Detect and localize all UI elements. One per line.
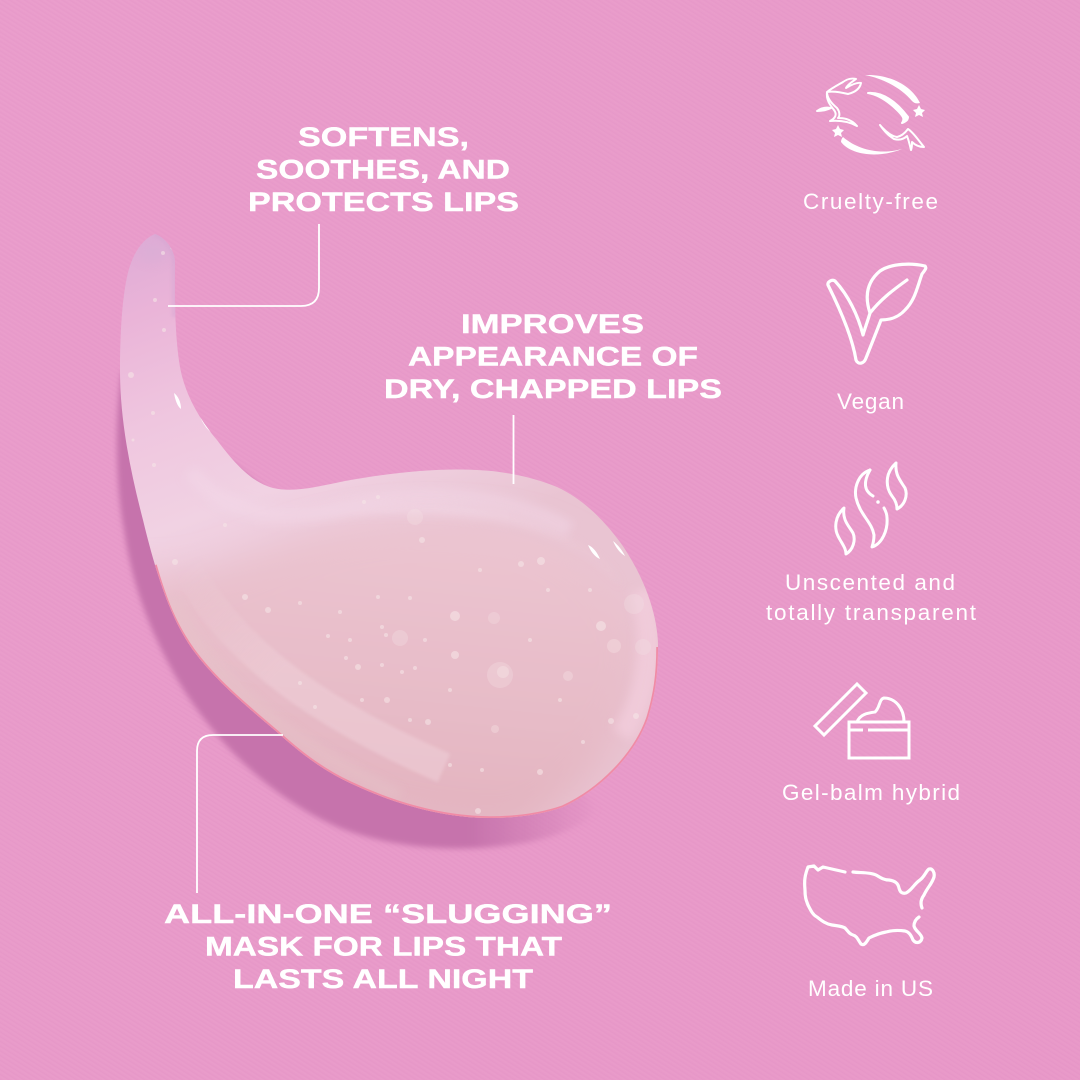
label: Made in US xyxy=(808,976,933,1001)
leader line xyxy=(512,415,514,484)
heading: ALL-IN-ONE “SLUGGING” xyxy=(164,899,612,929)
label: Gel-balm hybrid xyxy=(782,780,960,805)
heading: LASTS ALL NIGHT xyxy=(233,964,534,994)
icon: leaf V xyxy=(828,264,926,363)
label: Vegan xyxy=(837,389,904,414)
callout: improves appearance xyxy=(384,309,722,484)
label: Cruelty-free xyxy=(803,189,938,214)
heading: IMPROVES xyxy=(461,309,644,339)
feature: gel-balm hybrid xyxy=(782,684,960,805)
icon: US map outline xyxy=(805,866,934,945)
heading: SOFTENS, xyxy=(298,122,469,152)
heading: PROTECTS LIPS xyxy=(248,187,519,217)
leader line xyxy=(197,735,283,893)
label: Unscented and xyxy=(785,570,955,595)
swatch shadow xyxy=(117,370,600,848)
feature: unscented xyxy=(766,463,977,625)
heading xyxy=(384,309,722,404)
callout: softens, soothes, and protects lips xyxy=(168,122,519,306)
heading: SOOTHES, AND xyxy=(256,154,510,184)
icon: leaping rabbit xyxy=(817,75,925,154)
rim xyxy=(155,565,658,818)
heading xyxy=(164,899,612,994)
light band xyxy=(244,648,448,780)
leader line xyxy=(168,224,319,306)
feature: cruelty-free xyxy=(803,75,938,214)
gel body xyxy=(120,234,658,818)
label xyxy=(766,570,977,625)
heading: DRY, CHAPPED LIPS xyxy=(384,374,722,404)
gel swatch with shadow xyxy=(100,220,680,848)
icon: open jar xyxy=(815,684,909,758)
feature: made in US xyxy=(805,866,934,1001)
icon: scent wisps xyxy=(836,463,906,554)
gloss highlights xyxy=(174,393,625,559)
feature: vegan xyxy=(828,264,926,414)
heading: APPEARANCE OF xyxy=(408,342,698,372)
bubbles xyxy=(128,246,651,814)
label: totally transparent xyxy=(766,600,977,625)
heading: MASK FOR LIPS THAT xyxy=(205,932,563,962)
callout: all-in-one slugging mask xyxy=(164,735,612,994)
heading xyxy=(248,122,519,217)
